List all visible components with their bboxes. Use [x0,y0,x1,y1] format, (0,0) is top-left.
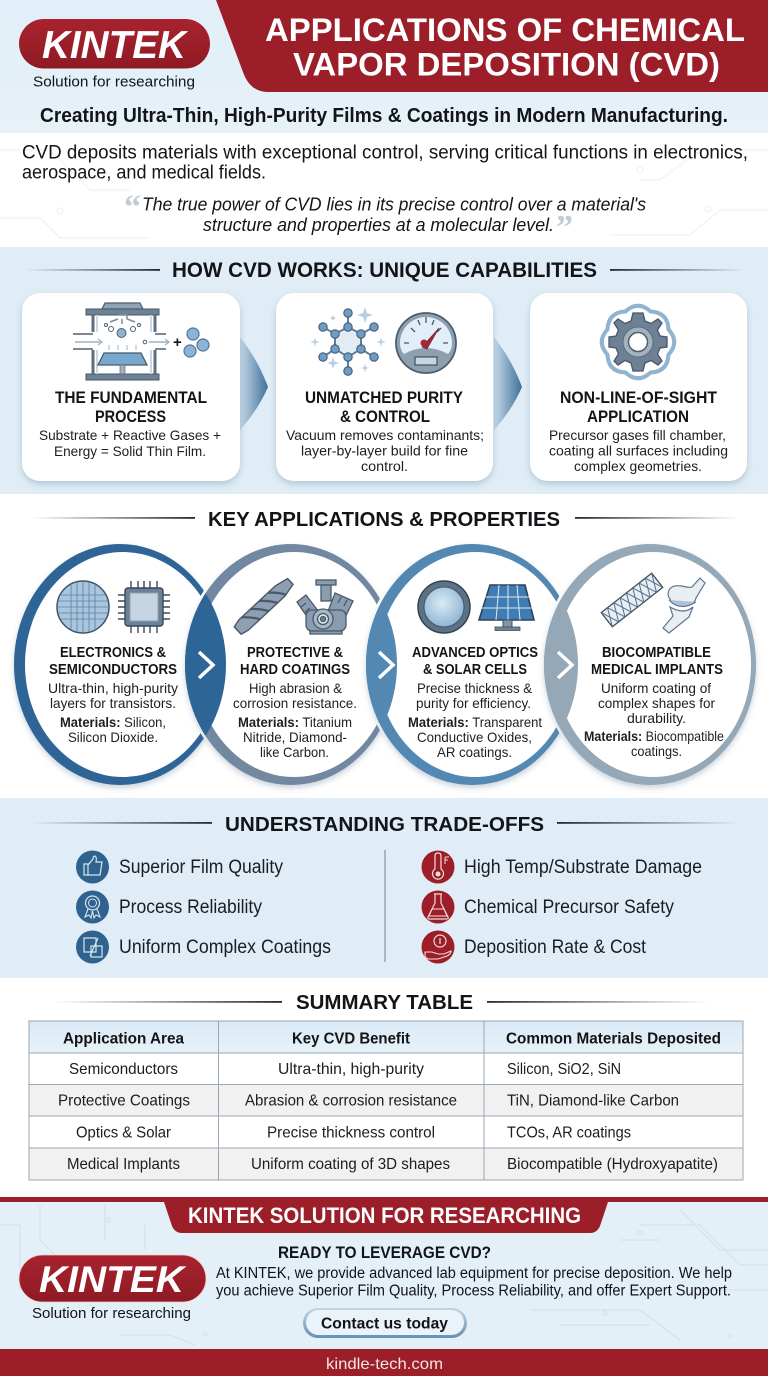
card: non-line-of-sight [530,293,747,481]
item: superior film quality [76,850,283,884]
panel: introduction [0,133,768,247]
panel: footer call to action [0,1197,768,1350]
table: Abrasion & corrosion resistance [245,1092,457,1110]
card text: complex geometries. [574,458,702,474]
arrow [240,337,268,430]
card title: & CONTROL [340,408,430,426]
banner: KINTEK SOLUTION FOR RESEARCHING [188,1203,581,1228]
card title: UNMATCHED PURITY [305,389,463,407]
ring text: electronics: layers for transistors. [50,695,176,711]
arrow [494,337,522,430]
panel: summary table [0,978,768,1198]
ring text: optics [408,645,542,760]
table: Precise thickness control [267,1124,435,1142]
ring text: medical: complex shapes for [598,695,715,711]
table: Biocompatible (Hydroxyapatite) [507,1156,718,1173]
card title [560,389,717,426]
card title [55,389,207,426]
title banner [216,0,768,92]
item: high temp: High Temp/Substrate Damage [464,857,702,878]
ring: medical [541,542,759,788]
icon: engine [297,580,353,634]
ring text: protective: Materials: Titanium [238,714,352,730]
heading: SUMMARY TABLE [296,991,473,1014]
arrow: chevron [558,652,572,678]
card text: Vacuum removes contaminants; [286,427,484,443]
card: purity and control [276,293,493,481]
item: superior film quality: Superior Film Quality [119,857,283,878]
ring text: electronics: Materials: Silicon, [60,714,166,730]
table: Optics & Solar [76,1124,172,1142]
title: APPLICATIONS OF CHEMICAL [265,12,745,48]
icon: drill bit [233,576,295,636]
ring text: electronics [48,645,178,745]
ring text: optics: purity for efficiency. [416,695,531,711]
card text: Precursor gases fill chamber, [549,427,726,443]
table: Silicon, SiO2, SiN [507,1061,621,1078]
icon: knee joint [663,578,705,633]
logo: kintek [19,19,210,90]
cta text: At KINTEK, we provide advanced lab equipment for precise deposition. We help [216,1265,732,1282]
quote: ” [556,209,573,246]
ring text: optics: ADVANCED OPTICS [412,645,538,661]
card title: PROCESS [95,408,166,426]
table: Ultra-thin, high-purity [278,1061,424,1078]
card title: THE FUNDAMENTAL [55,389,207,407]
icon: optical lens [418,581,470,633]
footer bar: kindle-tech.com [326,1356,443,1373]
table: Common Materials Deposited [506,1030,721,1048]
subtitle: Creating Ultra-Thin, High-Purity Films & Coatings in Modern Manufacturing. [40,105,728,127]
table: TCOs, AR coatings [507,1124,631,1142]
ring text: protective [233,645,357,760]
quote: structure and properties at a molecular level. [203,215,554,235]
icon: gauge [396,313,456,373]
icon: silicon wafer [57,581,109,633]
ring text: medical: Materials: Biocompatible [584,728,724,744]
table: Uniform coating of 3D shapes [251,1156,450,1173]
ring text: electronics: ELECTRONICS & [60,645,166,661]
heading: UNDERSTANDING TRADE-OFFS [225,813,544,836]
card text: layer-by-layer build for fine [301,442,468,458]
card title [305,389,463,426]
ring text: electronics: Ultra-thin, high-purity [48,680,178,696]
cta text [216,1265,732,1300]
header band [0,0,768,133]
logo: kintek: KINTEK [39,1259,186,1300]
quote: The true power of CVD lies in its precise control over a material's [142,194,646,214]
logo: kintek: KINTEK [42,24,189,67]
title [265,12,745,82]
card text [549,427,728,474]
icon: coated gear [602,306,674,378]
card text [39,427,221,459]
icon: cvd chamber: + [173,334,182,351]
icon: microchip [118,581,170,633]
logo: kintek: Solution for researching [32,1306,191,1322]
item: high temp [422,850,702,884]
cta text: you achieve Superior Film Quality, Process Reliability, and offer Expert Support. [216,1282,731,1300]
icon: cvd chamber [73,303,209,380]
quote [124,189,646,246]
card: fundamental process [22,293,240,481]
ring text: protective: Nitride, Diamond- [243,729,347,745]
footer bar [0,1349,768,1376]
ring text: medical: durability. [627,710,686,726]
heading: HOW CVD WORKS: UNIQUE CAPABILITIES [172,259,597,282]
ring text: protective: like Carbon. [260,744,329,760]
cta heading: READY TO LEVERAGE CVD? [278,1243,491,1262]
heading: KEY APPLICATIONS & PROPERTIES [208,508,560,531]
ring text: electronics: SEMICONDUCTORS [49,662,177,678]
table: Key CVD Benefit [292,1030,411,1048]
intro text [22,142,748,184]
item: uniform complex coatings [76,930,331,964]
card title: APPLICATION [587,408,689,426]
quote: “ [124,189,141,226]
ring text: electronics: Silicon Dioxide. [68,729,158,745]
panel: how cvd works [0,247,768,494]
card text: coating all surfaces including [549,442,728,458]
card text: Substrate + Reactive Gases + [39,427,221,443]
button: Contact us today [321,1316,448,1332]
icon: molecule [310,307,386,375]
item: chemical safety [422,890,674,924]
ring: protective [182,542,400,788]
item: uniform complex coatings: Uniform Complex Coatings [119,937,331,958]
ring text: medical: coatings. [631,743,682,759]
card text: Energy = Solid Thin Film. [54,443,206,459]
table: Semiconductors [69,1061,178,1078]
ring text: protective: High abrasion & [249,680,343,696]
ring text: protective: HARD COATINGS [240,662,350,678]
ring text: optics: & SOLAR CELLS [423,662,527,678]
item: chemical safety: Chemical Precursor Safety [464,897,674,918]
table [29,1021,743,1180]
item: deposition rate: Deposition Rate & Cost [464,937,647,958]
ring text: optics: AR coatings. [437,744,512,760]
panel: trade-offs [0,798,768,978]
logo: kintek [19,1255,206,1322]
arrow: chevron [379,652,393,678]
card title: NON-LINE-OF-SIGHT [560,389,717,407]
table: Medical Implants [67,1156,180,1173]
button [303,1308,467,1338]
intro text: aerospace, and medical fields. [22,162,266,184]
item: process reliability: Process Reliability [119,897,262,918]
ring text: medical: BIOCOMPATIBLE [602,645,711,661]
ring text: protective: corrosion resistance. [233,695,357,711]
logo: kintek: Solution for researching [33,74,195,90]
intro text: CVD deposits materials with exceptional control, serving critical functions in electronics, [22,142,748,164]
ring: optics [363,542,581,788]
item: process reliability [76,890,262,924]
ring text: optics: Materials: Transparent [408,714,542,730]
ring text: optics: Conductive Oxides, [417,729,532,745]
ring text: medical: Uniform coating of [601,680,711,696]
ring: electronics [14,544,226,785]
panel: key applications [12,512,758,790]
table: TiN, Diamond-like Carbon [507,1092,679,1110]
ring text: protective: PROTECTIVE & [247,645,343,661]
card text [286,427,484,474]
ring text: medical: MEDICAL IMPLANTS [591,662,723,678]
arrow: chevron [199,652,213,678]
icon: solar panel [479,585,534,630]
table: Protective Coatings [58,1092,190,1110]
card text: control. [361,458,408,474]
title: VAPOR DEPOSITION (CVD) [293,46,720,82]
table: Application Area [63,1030,184,1048]
ring text: optics: Precise thickness & [417,680,533,696]
icon: stent [601,573,663,627]
ring text: medical [584,645,724,759]
item: deposition rate [422,930,647,964]
